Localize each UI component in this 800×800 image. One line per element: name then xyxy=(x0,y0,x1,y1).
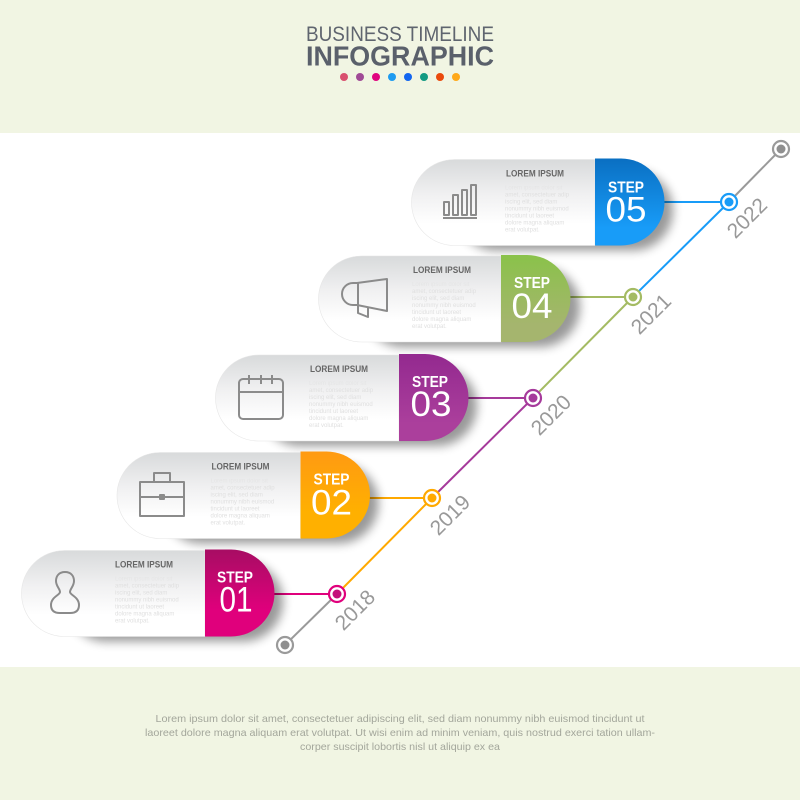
panel: step 03: STEP xyxy=(412,374,448,391)
panel: step 03: LOREM IPSUM xyxy=(310,364,368,374)
icon: megaphone xyxy=(342,279,387,317)
panel: step 04: tincidunt ut laoreet xyxy=(412,310,461,316)
panel: step 02: STEP xyxy=(314,472,350,488)
panel: step 01: amet, consectetuer adip xyxy=(115,584,180,590)
panel: step 04: LOREM IPSUM xyxy=(413,265,471,275)
year labels xyxy=(331,194,772,635)
footer text: Lorem ipsum dolor sit amet, consectetuer adipiscing elit, sed diam nonummy nibh euismod tincidunt ut xyxy=(156,713,645,725)
icon: calendar xyxy=(239,375,283,419)
icon: briefcase xyxy=(140,473,184,516)
icon: person xyxy=(51,572,79,613)
panel: step 01: 01 xyxy=(220,580,252,620)
panel: step 05: iscing elit, sed diam xyxy=(505,200,557,206)
panel: step 02: 02 xyxy=(311,484,352,522)
year labels: 2022 xyxy=(723,194,772,243)
panel: step 03 xyxy=(216,354,477,446)
panel: step 04: dolore magna aliquam xyxy=(412,317,471,323)
panel: step 04: iscing elit, sed diam xyxy=(412,296,464,302)
panel: step 01: STEP xyxy=(217,570,253,586)
panel: step 05: nonummy nibh euismod xyxy=(505,206,569,212)
panel: step 02: erat volutpat. xyxy=(210,520,246,526)
timeline diagonal line xyxy=(285,149,781,645)
panel: step 05: LOREM IPSUM xyxy=(506,168,564,178)
year labels: 2021 xyxy=(627,290,676,339)
panel: step 04 xyxy=(318,255,580,347)
top header band xyxy=(0,0,800,133)
year labels: 2020 xyxy=(527,391,576,440)
panel: step 05: Lorem ipsum dolor sit xyxy=(505,186,563,192)
footer text xyxy=(145,713,656,753)
panel: step 02: LOREM IPSUM xyxy=(212,462,270,472)
panel: step 05: 05 xyxy=(606,190,646,230)
panel: step 05 xyxy=(412,158,673,250)
panel: step 01: iscing elit, sed diam xyxy=(115,590,167,596)
panel: step 02: tincidunt ut laoreet xyxy=(210,506,260,512)
panel: step 02: amet, consectetuer adip xyxy=(210,486,275,492)
panel: step 01: erat volutpat. xyxy=(115,618,150,624)
footer text: corper suscipit lobortis nisl ut aliquip ex ea xyxy=(300,741,500,753)
panel: step 05: STEP xyxy=(608,180,644,196)
panel: step 01: dolore magna aliquam xyxy=(115,612,174,618)
footer text: laoreet dolore magna aliquam erat volutpat. Ut wisi enim ad minim veniam, quis nostrud exerci tation ullam- xyxy=(145,727,656,739)
panel: step 03: dolore magna aliquam xyxy=(309,416,368,422)
panel: step 02: iscing elit, sed diam xyxy=(210,492,263,498)
panel: step 03: tincidunt ut laoreet xyxy=(309,409,358,415)
panel: step 01: nonummy nibh euismod xyxy=(115,598,179,604)
panel: step 03: erat volutpat. xyxy=(309,423,344,429)
year labels: 2019 xyxy=(426,491,475,540)
coloured dots row xyxy=(340,73,460,81)
panel: step 05: amet, consectetuer adip xyxy=(505,192,570,198)
panel: step 04: 04 xyxy=(512,287,552,326)
title xyxy=(306,23,494,72)
panel: step 03: amet, consectetuer adip xyxy=(309,388,374,394)
panel: step 04: amet, consectetuer adip xyxy=(412,289,477,295)
panel: step 02: Lorem ipsum dolor sit xyxy=(210,478,268,484)
panel: step 04: erat volutpat. xyxy=(412,324,447,330)
panel: step 04: nonummy nibh euismod xyxy=(412,303,476,309)
panel: step 03: iscing elit, sed diam xyxy=(309,395,361,401)
panel: step 02 xyxy=(117,452,378,544)
panel: step 01: Lorem ipsum dolor sit xyxy=(115,576,173,582)
year labels: 2018 xyxy=(331,586,380,635)
bottom footer band xyxy=(0,667,800,800)
panel: step 01 xyxy=(22,550,283,642)
title: BUSINESS TIMELINE xyxy=(306,23,494,46)
panel: step 02: dolore magna aliquam xyxy=(210,514,270,520)
panel: step 04: Lorem ipsum dolor sit xyxy=(412,282,470,288)
panel: step 03: Lorem ipsum dolor sit xyxy=(309,381,367,387)
panel: step 01: LOREM IPSUM xyxy=(115,560,173,570)
panel: step 05: tincidunt ut laoreet xyxy=(505,214,554,220)
panel: step 05: dolore magna aliquam xyxy=(505,220,564,226)
timeline nodes xyxy=(277,141,789,653)
panel: step 01: tincidunt ut laoreet xyxy=(115,604,164,610)
panel: step 03: nonummy nibh euismod xyxy=(309,402,373,408)
panel: step 03: 03 xyxy=(410,385,452,424)
panel: step 02: nonummy nibh euismod xyxy=(210,500,274,506)
title: INFOGRAPHIC xyxy=(306,40,494,72)
panel: step 04: STEP xyxy=(514,275,550,292)
icon: bar chart xyxy=(443,185,477,218)
panel: step 05: erat volutpat. xyxy=(505,228,540,234)
connector lines from steps to timeline xyxy=(270,202,729,594)
